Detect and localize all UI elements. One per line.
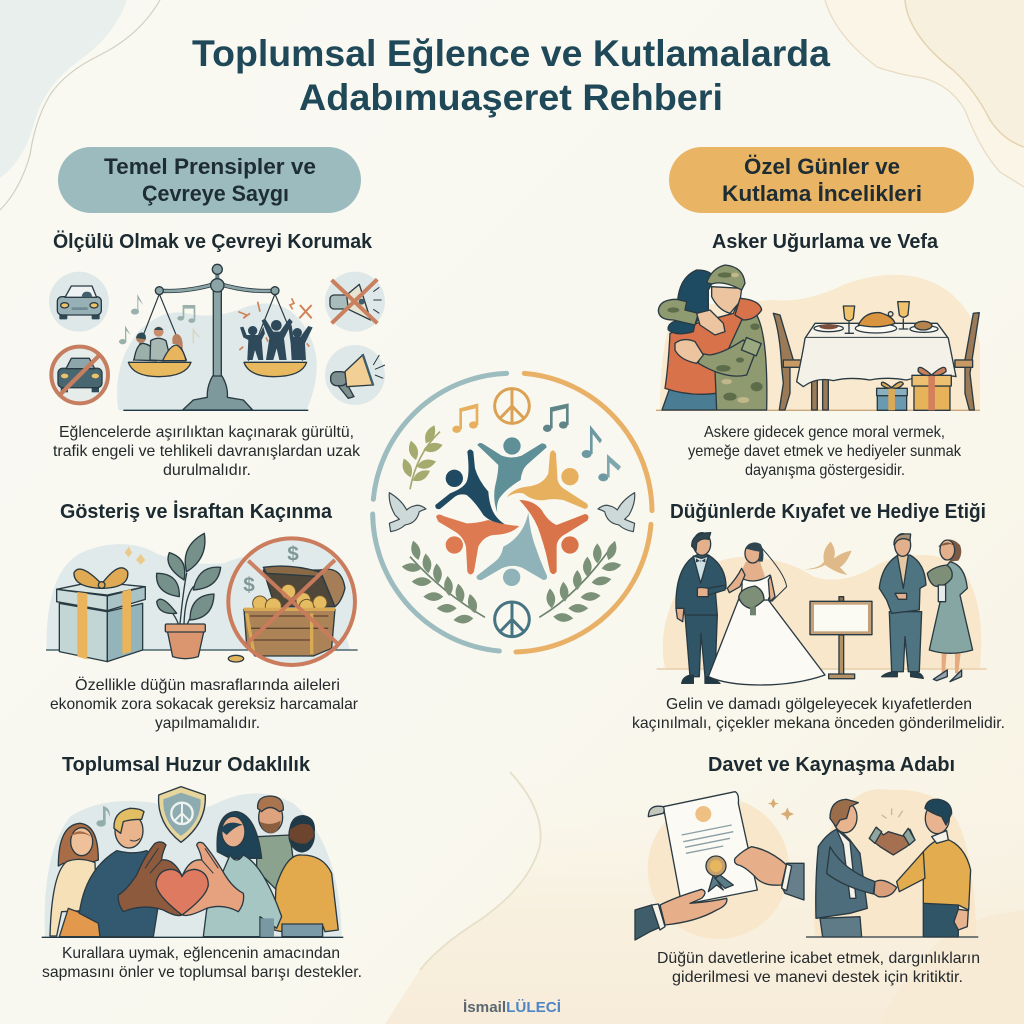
man behind right [257, 796, 295, 890]
man in yellow sweater [897, 799, 971, 937]
gifts [877, 367, 951, 410]
heading: Gösteriş: Gösteriş ve İsraftan Kaçınma [60, 500, 333, 523]
icon: gift box [57, 547, 145, 662]
father [879, 534, 926, 678]
upper hand [735, 847, 804, 900]
people: calm group [134, 327, 186, 361]
icon: megaphone [325, 345, 385, 405]
icon: handshake [869, 808, 915, 855]
food [814, 302, 938, 333]
hands with heart [118, 842, 244, 916]
icon: crossed treasure chest: $ [243, 574, 255, 597]
illustration: scale and moderation [49, 264, 385, 410]
body text: peace: Kurallara uymak, eğlencenin amacından [62, 945, 340, 962]
body text: moderation: trafik engeli ve tehlikeli davranışlardan uzak [53, 443, 361, 460]
peace symbols [495, 389, 529, 637]
woman left [50, 823, 100, 937]
heading: Davet: Davet ve Kaynaşma Adabı [708, 753, 955, 776]
panel heading: Özel Günler [669, 147, 974, 213]
icon: crossed treasure chest [228, 538, 355, 665]
body text: waste: yapılmamalıdır. [155, 715, 260, 732]
title: Adabımuaşeret Rehberi [299, 77, 723, 118]
shield with peace sign [159, 787, 205, 842]
body text: soldier: Askere gidecek gence moral vermek, [704, 424, 945, 441]
icon: plant in pot [157, 533, 221, 659]
man yellow sweater [274, 815, 338, 937]
body text: soldier: dayanışma göstergesidir. [745, 462, 905, 479]
dove motif [804, 542, 852, 575]
body text: invitation: Düğün davetlerine icabet etmek, dargınlıkların [657, 950, 980, 967]
panel heading: Özel Günler: Özel Günler ve [744, 154, 900, 179]
body text: wedding [632, 696, 1005, 732]
heading: Düğünlerde: Düğünlerde Kıyafet ve Hediye Etiği [670, 500, 986, 523]
woman teal top [203, 812, 282, 937]
table [797, 323, 956, 410]
body text: waste: ekonomik zora sokacak gereksiz harcamalar [50, 696, 359, 713]
body text: peace [42, 945, 362, 981]
scale [123, 264, 308, 410]
icon: crossed treasure chest: $ [287, 543, 299, 566]
title: Toplumsal Eğlence ve Kutlamalarda [192, 33, 830, 74]
body text: peace: sapmasını önler ve toplumsal barışı destekler. [42, 964, 362, 981]
sign [810, 597, 872, 679]
panel heading: Temel Prensipler [58, 147, 361, 213]
panel heading: Temel Prensipler: Temel Prensipler ve [104, 154, 316, 179]
title [192, 33, 830, 118]
music notes [452, 403, 621, 481]
lower hand [635, 889, 727, 940]
figures [435, 437, 589, 586]
icon: coin [228, 655, 244, 662]
ring arcs [373, 373, 652, 652]
body text: moderation: durulmalıdır. [163, 462, 251, 479]
illustration: wedding [657, 533, 987, 685]
heading: Asker Uğurlama: Asker Uğurlama ve Vefa [712, 230, 939, 253]
man in suit [816, 799, 875, 937]
panel heading: Temel Prensipler: Çevreye Saygı [142, 181, 289, 206]
olive branches [400, 423, 622, 624]
music note [96, 806, 110, 827]
icon: no car [51, 347, 108, 403]
chairs [773, 313, 979, 410]
center emblem [373, 373, 652, 652]
illustration: invitation and handshake [635, 789, 978, 940]
doves [389, 493, 635, 532]
illustration: gift, plant, treasure [46, 533, 358, 665]
scale pans [128, 362, 307, 377]
icon: car [49, 272, 109, 332]
groom [676, 533, 726, 683]
body text: soldier [688, 424, 962, 479]
hands shaking [874, 880, 897, 897]
body text: waste [50, 676, 359, 732]
body text: moderation: Eğlencelerde aşırılıktan kaçınarak gürültü, [59, 424, 354, 441]
panel heading: Özel Günler: Kutlama İncelikleri [722, 181, 922, 206]
body text: wedding: Gelin ve damadı gölgeleyecek kıyafetlerden [666, 696, 972, 713]
icon: muted speaker [325, 272, 385, 332]
music and noise marks [119, 294, 312, 350]
body text: invitation [657, 950, 980, 986]
author logo: İsmailLÜLECİ [463, 999, 561, 1016]
body text: moderation [53, 424, 361, 479]
woman hugging [662, 298, 760, 410]
body text: invitation: giderilmesi ve manevi destek için kritiktir. [672, 969, 963, 986]
people: loud group [240, 318, 313, 360]
illustration: soldier farewell and table [656, 265, 980, 410]
mother [927, 540, 973, 682]
heading: Toplumsal Huzur: Toplumsal Huzur Odaklılık [62, 753, 311, 776]
heading: Ölçülü Olmak: Ölçülü Olmak ve Çevreyi Korumak [53, 230, 373, 253]
body text: waste: Özellikle düğün masraflarında aileleri [75, 676, 340, 694]
bride [708, 542, 825, 685]
sparkles [768, 798, 794, 821]
body text: soldier: yemeğe davet etmek ve hediyeler sunmak [688, 443, 962, 460]
body text: wedding: kaçınılmalı, çiçekler mekana önceden gönderilmelidir. [632, 715, 1005, 732]
illustration: people making a heart [42, 787, 343, 937]
soldier [658, 265, 767, 410]
invitation scroll [648, 792, 757, 905]
man blue sweater [79, 808, 165, 937]
